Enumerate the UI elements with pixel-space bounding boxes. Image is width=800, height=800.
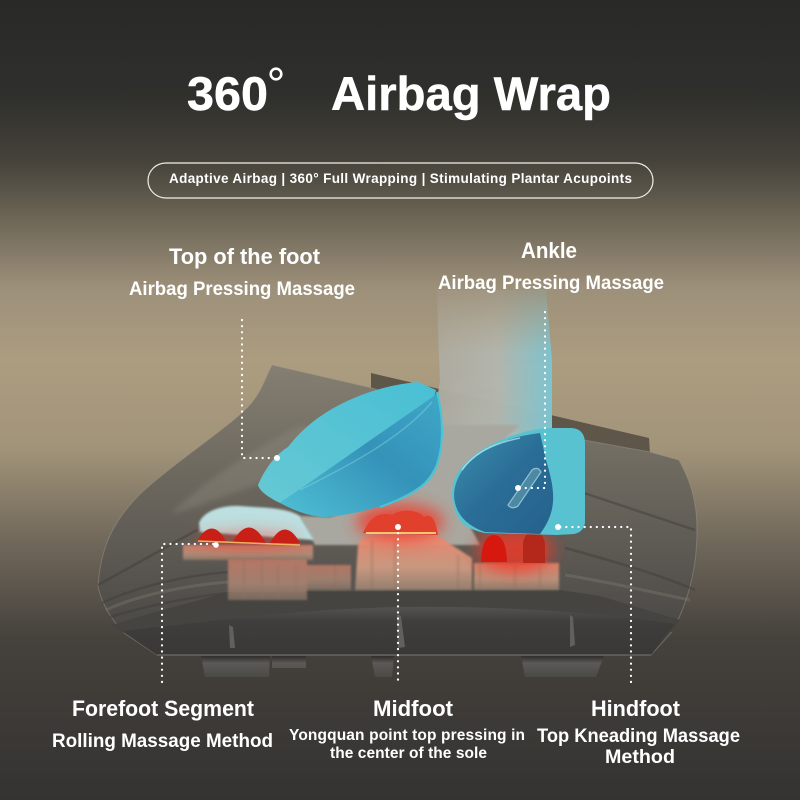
- leader dots: [213, 455, 561, 548]
- title: Airbag Wrap: [331, 67, 611, 120]
- title: 360: [187, 67, 268, 120]
- lighter inner shell area: [170, 425, 330, 515]
- subtitle pill: [148, 163, 653, 198]
- label: hindfoot: Hindfoot: [591, 696, 681, 721]
- label: midfoot: [289, 696, 525, 762]
- label: forefoot segment: [52, 696, 273, 752]
- label: ankle: [438, 238, 664, 294]
- airbag: top of the foot: [258, 382, 442, 517]
- label: hindfoot: Method: [605, 746, 675, 768]
- label: hindfoot: [537, 696, 740, 768]
- label: top of the foot: Airbag Pressing Massage: [129, 278, 355, 300]
- label: forefoot segment: Rolling Massage Method: [52, 730, 273, 752]
- label: hindfoot: Top Kneading Massage: [537, 725, 740, 747]
- translucent foot: [300, 425, 520, 545]
- toes: [199, 506, 314, 540]
- shell ridges: [98, 493, 695, 617]
- foot massager illustration: [98, 290, 697, 677]
- translucent leg: [438, 290, 552, 439]
- label: midfoot: the center of the sole: [330, 745, 487, 762]
- label: top of the foot: [129, 244, 355, 300]
- heated massage blocks: [183, 536, 559, 600]
- subtitle pill: Adaptive Airbag | 360° Full Wrapping | Stimulating Plantar Acupoints: [169, 171, 632, 186]
- label: ankle: Ankle: [521, 238, 577, 263]
- red glow: [198, 504, 553, 572]
- base slots: [229, 614, 575, 648]
- title: [187, 67, 611, 120]
- dark base: [122, 607, 675, 655]
- airbag valve: [508, 468, 541, 508]
- airbag: ankle: [452, 428, 585, 535]
- rubber feet: [201, 656, 604, 677]
- label: ankle: Airbag Pressing Massage: [438, 272, 664, 294]
- label: top of the foot: Top of the foot: [169, 244, 321, 269]
- label: midfoot: Midfoot: [373, 696, 454, 721]
- label: forefoot segment: Forefoot Segment: [72, 696, 255, 721]
- back panel: [371, 373, 651, 470]
- red rollers and nodes: [197, 511, 545, 563]
- massager shell: [98, 365, 697, 655]
- label: midfoot: Yongquan point top pressing in: [289, 727, 525, 744]
- dotted leader lines: [162, 312, 631, 684]
- lower band: [112, 590, 680, 633]
